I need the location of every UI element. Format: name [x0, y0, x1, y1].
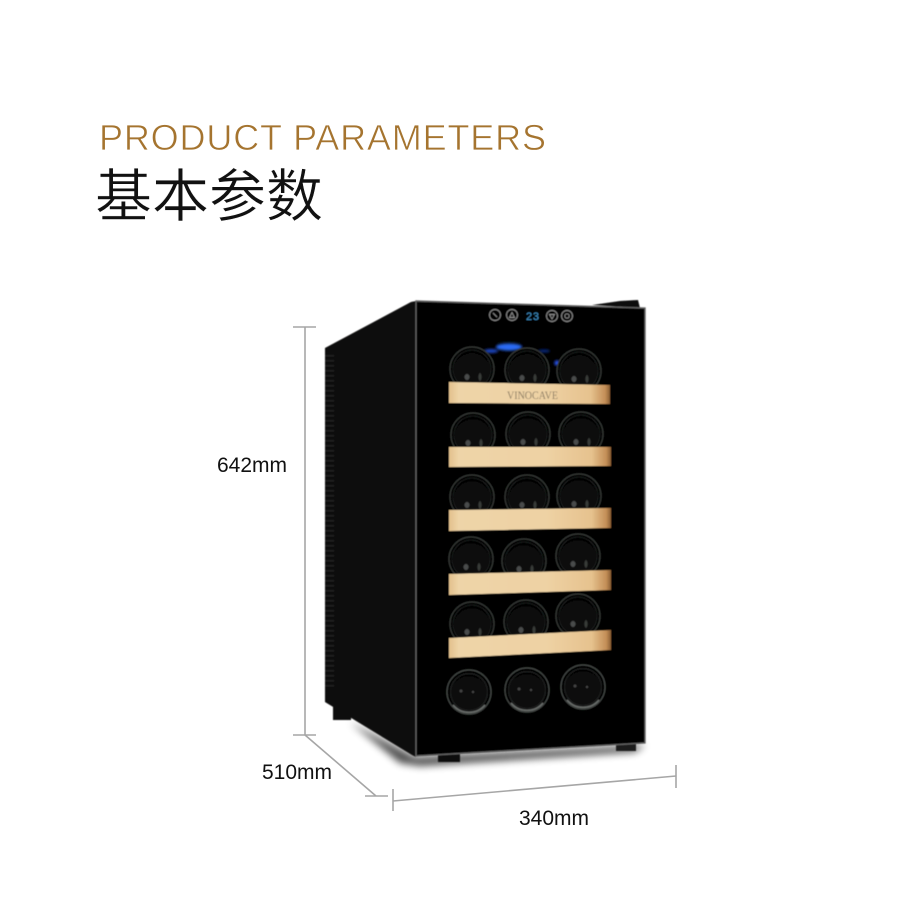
dimension: depth [305, 735, 388, 796]
side panel [325, 301, 416, 757]
control panel [490, 310, 572, 323]
bottles row 3 [450, 474, 601, 519]
temperature display: 23 [526, 311, 540, 323]
floor shadow [350, 722, 645, 766]
bottles row 1 [450, 347, 601, 393]
handle [592, 300, 640, 308]
side vents [325, 354, 334, 690]
bottles row 2 [451, 412, 603, 457]
shelf 1 with brand: VINOCAVE [507, 388, 558, 402]
label: 642mm: 642mm [217, 454, 287, 477]
bottles row 4 [449, 534, 600, 583]
front door [416, 301, 645, 756]
label: 340mm: 340mm [519, 807, 589, 830]
blue LED [484, 344, 560, 366]
heading: 基本参数: 基本参数 [95, 165, 323, 229]
rear foot [333, 705, 351, 720]
shelf 2 [449, 447, 611, 467]
title: PRODUCT PARAMETERS: PRODUCT PARAMETERS [99, 117, 546, 158]
label: 510mm: 510mm [262, 761, 332, 784]
bottles row 5 [450, 594, 600, 646]
shelf 5 [449, 630, 611, 658]
window [450, 343, 612, 663]
front feet [438, 754, 460, 762]
wine cooler product [325, 300, 645, 766]
shelf 4 [449, 570, 611, 595]
shelf 3 [449, 508, 611, 531]
dimension: width [393, 765, 676, 811]
shelf 1 with brand [449, 382, 610, 404]
bottles row 6 [447, 665, 605, 714]
dimension: height [293, 327, 316, 735]
